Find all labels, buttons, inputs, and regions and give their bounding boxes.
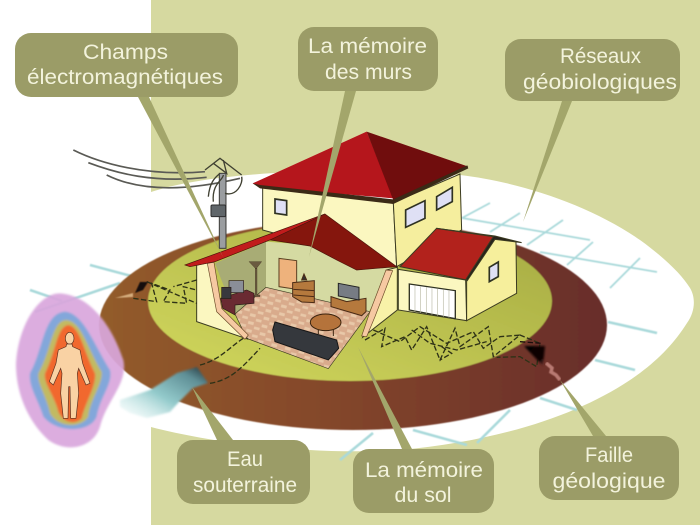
label: champs électromagnétiques: Champs (83, 41, 168, 64)
desk and computer (221, 281, 254, 315)
label: eau souterraine: Eau (227, 448, 263, 471)
ground discs (99, 220, 607, 430)
label: la mémoire du sol: La mémoire (365, 459, 483, 482)
front walls of cutaway (197, 263, 397, 339)
pointer: faille géologique (560, 380, 606, 436)
power pole and wires (73, 150, 242, 248)
TV unit (331, 283, 366, 316)
pointer: la mémoire des murs (309, 91, 356, 257)
aura layers (16, 293, 124, 447)
geological fault cracks (365, 327, 542, 367)
underground water (120, 367, 208, 418)
label: la mémoire des murs (298, 27, 438, 91)
label: la mémoire des murs: La mémoire (308, 35, 427, 58)
label: réseaux géobiologiques: Réseaux (560, 45, 641, 68)
pointer: la mémoire du sol (358, 347, 412, 449)
pointer: réseaux géobiologiques (523, 101, 572, 222)
cutaway interior (215, 242, 393, 369)
chest of drawers (293, 274, 314, 303)
label: faille géologique: géologique (552, 470, 666, 493)
label: faille géologique: Faille (585, 444, 633, 467)
label: eau souterraine: souterraine (193, 474, 297, 497)
left fault opening (115, 282, 148, 298)
label: champs électromagnétiques: électromagnétiques (27, 66, 223, 89)
label: la mémoire des murs: des murs (325, 61, 412, 84)
left cracks (133, 280, 260, 383)
label: faille géologique (539, 436, 679, 500)
door (279, 258, 297, 289)
label: eau souterraine (177, 440, 310, 504)
fault opening (524, 346, 560, 380)
label: la mémoire du sol: du sol (394, 484, 452, 507)
garage (398, 228, 522, 321)
floor lamp (249, 262, 262, 297)
sofa (273, 322, 339, 360)
human figure (49, 332, 90, 418)
label: champs électromagnétiques (15, 33, 238, 97)
garage door (409, 284, 455, 319)
human aura (16, 293, 124, 447)
upper floor walls (263, 174, 462, 267)
label: réseaux géobiologiques (505, 39, 680, 101)
label: réseaux géobiologiques: géobiologiques (523, 71, 677, 94)
cutaway roof (185, 214, 397, 270)
geobiological grid lines (30, 203, 657, 460)
upper windows (275, 187, 452, 227)
main roof (253, 132, 468, 204)
wall section edges (207, 262, 393, 339)
pointer: eau souterraine (192, 387, 233, 440)
label: la mémoire du sol (353, 449, 494, 513)
pointer: champs électromagnétiques (138, 97, 223, 257)
house (185, 132, 522, 369)
garage window (489, 262, 498, 282)
round table (310, 314, 341, 336)
